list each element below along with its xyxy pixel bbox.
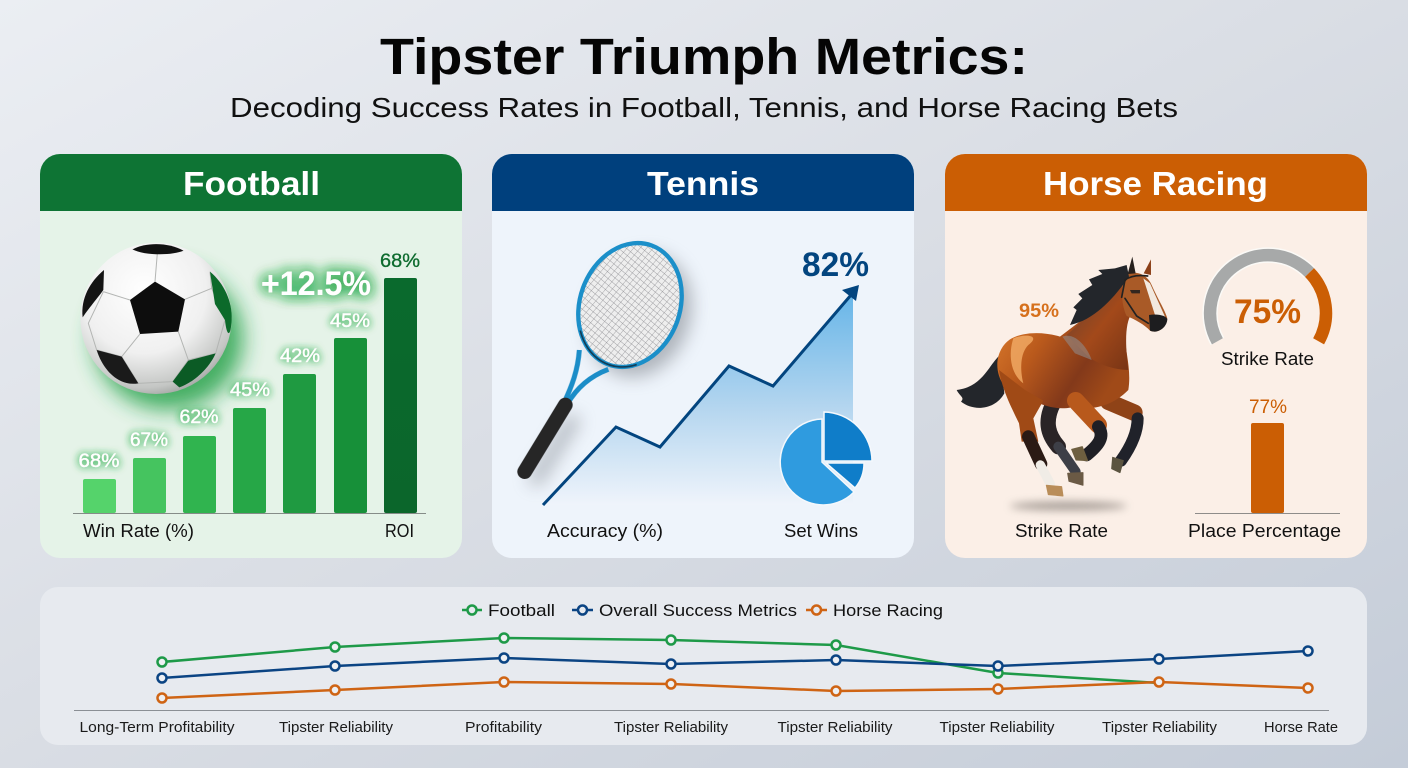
bar 6: [334, 338, 367, 513]
line: football: [158, 634, 1159, 683]
label: 95%: 95%: [1019, 301, 1059, 322]
bar 5: [283, 374, 316, 513]
bar 7: [384, 278, 417, 513]
value labels: 67%: [130, 430, 168, 451]
icon: soccer ball: [80, 243, 243, 410]
value labels: 45%: [330, 311, 370, 332]
x axis labels: Horse Rate: [1264, 720, 1338, 736]
legend: football: [462, 601, 555, 620]
arrow head: [842, 285, 859, 301]
value labels: 68%: [78, 451, 120, 472]
bar 3: [183, 436, 216, 513]
near hind leg: [999, 370, 1043, 442]
value labels: 62%: [180, 407, 219, 428]
neck: [1067, 275, 1142, 370]
bar 2: [133, 458, 166, 513]
label: ROI: ROI: [385, 521, 414, 541]
x axis labels: Tipster Reliability: [279, 720, 394, 736]
subtitle: Decoding Success Rates in Football, Tennis, and Horse Racing Bets: [230, 92, 1178, 123]
value labels: 42%: [280, 346, 320, 367]
x axis labels: Tipster Reliability: [614, 720, 729, 736]
value labels: [78, 311, 370, 472]
body: [997, 310, 1129, 408]
label: gauge strike rate: Strike Rate: [1221, 349, 1314, 369]
label: win rate: Win Rate (%): [83, 521, 194, 541]
legend: football: Football: [488, 601, 555, 620]
tennis header: [492, 154, 914, 211]
far fore leg: [1108, 402, 1138, 473]
tail: [957, 354, 1004, 408]
x axis labels: Tipster Reliability: [778, 720, 893, 736]
line: overall success: [158, 646, 1312, 682]
ROI value: 68%: [380, 251, 420, 272]
line: horse racing: [158, 678, 1312, 702]
value labels: 45%: [230, 380, 270, 401]
label: horse strike rate: Strike Rate: [1015, 521, 1108, 541]
x axis labels: Profitability: [465, 720, 543, 736]
legend: [462, 601, 943, 620]
gauge: strike rate 75%: [1210, 255, 1326, 341]
horse racing header: Horse Racing: [1043, 165, 1268, 202]
gauge value: 75%: [1234, 293, 1301, 331]
bar: place percentage: [1195, 397, 1340, 514]
label: accuracy: Accuracy (%): [547, 521, 663, 541]
head: [1122, 273, 1167, 332]
x axis labels: Tipster Reliability: [1102, 720, 1218, 736]
bar 4: [233, 408, 266, 513]
far hind leg: [1048, 403, 1083, 485]
label: place percentage: Place Percentage: [1188, 521, 1341, 541]
icon: galloping horse: [957, 257, 1167, 510]
callout: 82%: 82%: [802, 246, 869, 284]
bar 1: [83, 479, 116, 513]
bar chart: win rate: [73, 251, 426, 514]
football header: Football: [183, 165, 320, 202]
near fore leg: [1076, 401, 1098, 425]
horse racing header: [945, 154, 1367, 211]
mane: [1070, 265, 1129, 325]
title: Tipster Triumph Metrics:: [380, 28, 1028, 85]
panel: football: [40, 154, 462, 558]
panel: overall success metrics: [40, 587, 1367, 745]
panel: horse racing: [945, 154, 1367, 558]
icon: tennis racket: [525, 228, 709, 483]
legend: overall: Overall Success Metrics: [599, 601, 797, 620]
panel: tennis: [492, 154, 914, 558]
x axis labels: Long-Term Profitability: [80, 720, 235, 736]
bar: place percentage: 77%: [1249, 397, 1287, 418]
area line chart: [543, 285, 859, 505]
tennis header: Tennis: [647, 165, 759, 202]
callout: +12.5%: +12.5%: [261, 265, 371, 303]
label: set wins: Set Wins: [784, 521, 858, 541]
x axis labels: Tipster Reliability: [940, 720, 1055, 736]
legend: horse racing: Horse Racing: [833, 601, 943, 620]
icon: pie chart: [780, 412, 872, 505]
football header: [40, 154, 462, 211]
x axis labels: [80, 720, 1338, 736]
